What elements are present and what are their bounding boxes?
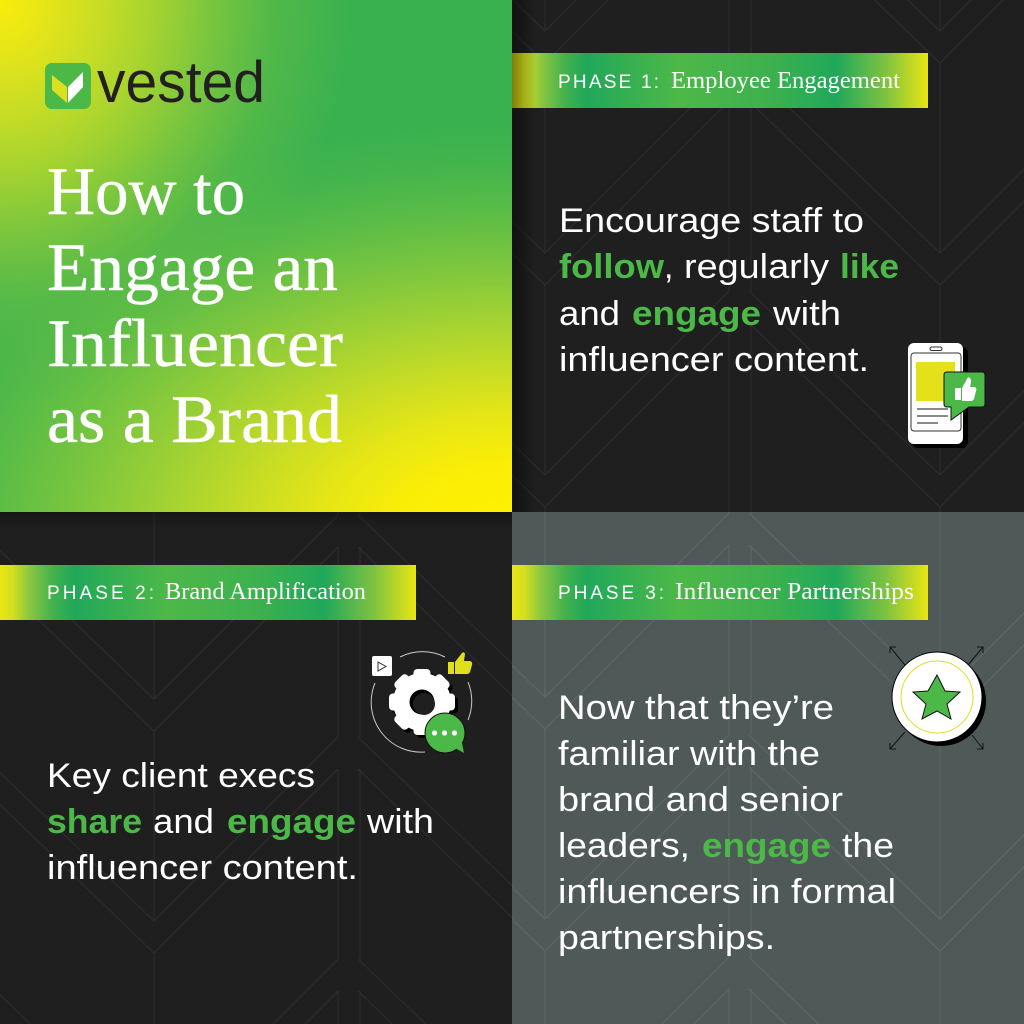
title: Influencer — [47, 305, 343, 381]
phase 2 body text: with — [366, 803, 434, 841]
phase 2 body text: and — [153, 803, 214, 841]
phase 2 body text: Key client execs — [47, 757, 315, 795]
title — [47, 153, 343, 457]
phase 1 body text: regularly — [684, 248, 829, 286]
phase 3 body text: Now that they’re — [558, 689, 834, 727]
phase 1 body text: with — [772, 295, 841, 333]
title: How to — [47, 153, 245, 229]
phase 3 body text: partnerships. — [558, 919, 775, 957]
panel: hero gradient — [0, 0, 512, 512]
phase 1 body text: and — [559, 295, 620, 333]
phase 3 banner: PHASE 3: — [558, 583, 664, 604]
phase 2 body text: engage — [227, 803, 356, 841]
phase 1 body text: follow — [559, 248, 665, 286]
phase 3 body text: leaders, — [558, 827, 690, 865]
phase 2 banner: Brand Amplification — [165, 579, 366, 605]
logo wordmark: vested — [97, 50, 265, 115]
panel: phase 3 background — [512, 512, 1024, 1024]
phase 1 body text: Encourage staff to — [559, 202, 864, 240]
phase 1 body text: like — [840, 248, 899, 286]
phase 2 banner: PHASE 2: — [47, 583, 154, 604]
phase 3 body text: brand and senior — [558, 781, 843, 819]
phase 3 body text: influencers in formal — [558, 873, 896, 911]
phase 1 banner: PHASE 1: — [558, 72, 659, 93]
phase 3 body text: the — [842, 827, 894, 865]
phase 1 body text: , — [664, 248, 673, 286]
panel: phase 1 background — [512, 0, 1024, 512]
phase 3 banner: Influencer Partnerships — [675, 579, 914, 605]
phase 3 body text — [558, 689, 896, 957]
logo: vested — [45, 50, 265, 115]
phase 2 body text: influencer content. — [47, 849, 358, 887]
icon: phone with thumbs up — [908, 343, 985, 448]
phase 3 body text: engage — [702, 827, 831, 865]
phase 1 body text — [559, 202, 899, 379]
phase 1 body text: influencer content. — [559, 341, 869, 379]
phase 2 banner — [0, 565, 416, 620]
phase 1 banner: Employee Engagement — [671, 68, 900, 94]
phase 3 body text: familiar with the — [558, 735, 820, 773]
title: Engage an — [47, 229, 338, 305]
phase 2 body text — [47, 757, 434, 887]
phase 1 banner — [512, 53, 928, 108]
phase 1 body text: engage — [632, 295, 761, 333]
icon: logo mark — [45, 63, 91, 109]
arrows — [890, 647, 983, 749]
phase 3 banner — [512, 565, 928, 620]
panel: phase 2 background — [0, 512, 512, 1024]
icon: star badge with arrows — [890, 647, 986, 749]
phase 2 body text: share — [47, 803, 142, 841]
title: as a Brand — [47, 381, 342, 457]
icon: gear with social reactions — [371, 652, 472, 753]
